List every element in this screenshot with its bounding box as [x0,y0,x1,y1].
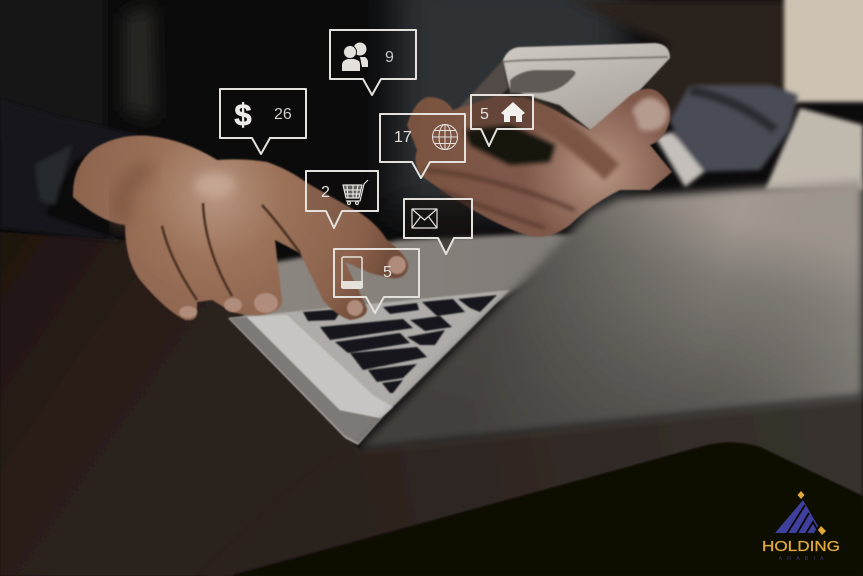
callout: people [330,30,416,95]
keys [303,295,497,393]
logo: Holding Arabia [762,491,840,562]
laptop lid [357,180,863,450]
callout: tablet device [334,249,419,313]
callout: home [471,95,533,146]
callout: home: 5 [480,106,489,123]
finger gaps [162,203,300,300]
fingernails [179,256,406,318]
callout: envelope [404,199,472,254]
callout: tablet device: 5 [383,264,392,281]
front edge [229,317,382,443]
phone [457,43,670,165]
callout: globe [380,114,465,178]
logo subtitle: ARABIA [778,556,824,562]
trackpad area [240,233,600,320]
callout: globe: 17 [394,129,412,146]
callout: cart [306,171,378,228]
logo wordmark: HOLDING [762,538,840,555]
right hand [407,89,672,237]
right cuff and sleeve [655,85,798,187]
callout: people: 9 [385,49,394,66]
left arm sleeve [0,100,140,242]
left hand [73,136,408,320]
callout: dollar [220,89,306,154]
callout: dollar: $ [234,97,252,132]
knuckle highlight [195,173,235,197]
logo mark [775,491,826,535]
dark tablet on table [232,442,863,576]
callout: dollar: 26 [274,106,292,123]
palm rest [247,315,393,418]
laptop base [228,233,600,445]
callout: cart: 2 [321,184,330,201]
keyboard deck [228,290,510,445]
